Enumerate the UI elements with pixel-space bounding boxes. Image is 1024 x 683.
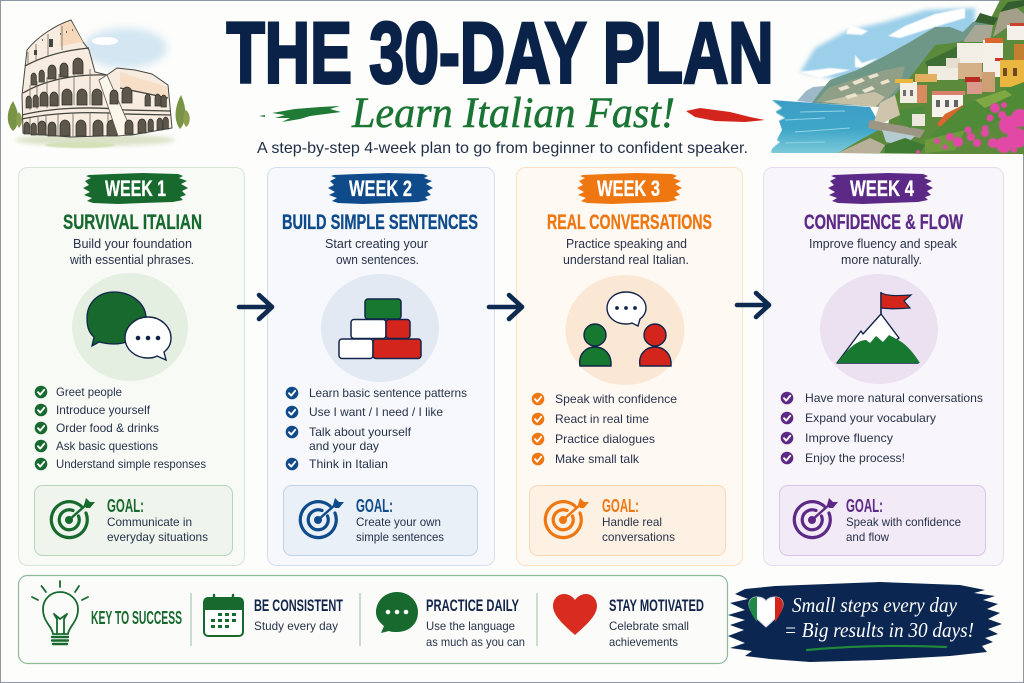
week 1 checklist: Greet people — [56, 385, 122, 399]
week 4 goal box: GOAL: — [846, 496, 883, 516]
week 3 goal box — [530, 486, 726, 556]
week 4 banner — [828, 173, 933, 204]
practice daily: Use the language — [426, 619, 515, 633]
be consistent — [254, 596, 343, 633]
stay motivated — [609, 596, 704, 649]
stay motivated: Celebrate small — [609, 619, 689, 633]
week 1 description — [69, 236, 194, 267]
stay motivated: STAY MOTIVATED — [609, 596, 704, 615]
week 1 checklist: Understand simple responses — [56, 457, 206, 471]
brush stroke: green — [259, 106, 341, 122]
week 2 description: Start creating your — [325, 236, 429, 251]
brush stroke: red — [686, 108, 765, 122]
week 2 banner — [328, 173, 433, 204]
illustration: Amalfi coast — [765, 0, 1024, 164]
week 3 checklist: Speak with confidence — [555, 392, 677, 406]
subtitle script: Learn Italian Fast! — [351, 90, 675, 137]
week 3 checklist: Make small talk — [555, 452, 640, 466]
week 2 checklist: Use I want / I need / I like — [309, 405, 443, 419]
week 1 goal box: GOAL: — [107, 496, 144, 516]
week 2 heading: BUILD SIMPLE SENTENCES — [282, 211, 478, 234]
callout text: Small steps every day — [792, 593, 958, 617]
icon: speech bubbles — [72, 273, 188, 381]
week 4 banner: WEEK 4 — [850, 176, 915, 201]
practice daily: PRACTICE DAILY — [426, 596, 519, 615]
week 2 checklist: and your day — [309, 439, 379, 453]
week 1 goal box: Communicate in — [107, 515, 192, 529]
panel: week 4 — [764, 168, 1004, 566]
practice daily: as much as you can — [426, 635, 525, 649]
icon: light bulb — [32, 581, 88, 644]
week 4 checklist — [781, 391, 983, 465]
practice daily — [426, 596, 525, 649]
week 1 heading: SURVIVAL ITALIAN — [63, 211, 202, 234]
week 3 banner: WEEK 3 — [597, 176, 660, 201]
week 3 checklist — [532, 392, 677, 466]
week 4 goal box: and flow — [846, 530, 889, 544]
week 4 goal box — [780, 486, 986, 556]
arrow 1 — [239, 295, 272, 319]
tagline: A step-by-step 4-week plan to go from beginner to confident speaker. — [257, 140, 748, 157]
week 2 banner: WEEK 2 — [349, 176, 412, 201]
week 3 banner — [577, 173, 682, 204]
week 3 description — [563, 236, 689, 267]
week 4 checklist: Have more natural conversations — [805, 391, 983, 405]
week 3 heading: REAL CONVERSATIONS — [547, 211, 712, 234]
illustration: Colosseum — [8, 20, 190, 148]
week 1 description: with essential phrases. — [69, 252, 194, 267]
week 3 description: Practice speaking and — [566, 236, 687, 251]
panel: week 2 — [268, 168, 494, 566]
key to success label: KEY TO SUCCESS — [91, 608, 182, 628]
be consistent: BE CONSISTENT — [254, 596, 343, 615]
week 3 goal box: GOAL: — [602, 496, 639, 516]
callout text: = Big results in 30 days! — [784, 618, 974, 642]
title: THE 30-DAY PLAN — [226, 6, 774, 102]
icon: two people talking — [566, 275, 684, 385]
week 2 description — [325, 236, 429, 267]
icon: calendar — [204, 595, 243, 636]
callout text — [784, 593, 974, 642]
week 1 banner: WEEK 1 — [105, 176, 166, 201]
week 2 description: own sentences. — [336, 252, 419, 267]
week 1 checklist: Introduce yourself — [56, 403, 151, 417]
icon: mountain with flag — [820, 274, 938, 384]
week 2 checklist: Think in Italian — [309, 457, 388, 471]
week 2 checklist: Learn basic sentence patterns — [309, 386, 467, 400]
week 3 checklist: React in real time — [555, 412, 649, 426]
panel: week 1 — [18, 168, 244, 566]
panel: week 3 — [516, 168, 742, 566]
week 1 checklist — [35, 385, 206, 471]
week 2 goal box: simple sentences — [356, 530, 444, 544]
week 4 checklist: Improve fluency — [805, 431, 893, 445]
icon: heart — [553, 594, 597, 635]
week 4 description: more naturally. — [841, 252, 922, 267]
icon: chat bubble — [376, 592, 418, 633]
arrow 2 — [489, 295, 522, 319]
week 4 description: Improve fluency and speak — [809, 236, 957, 251]
week 1 banner — [83, 173, 188, 204]
week 1 goal box: everyday situations — [107, 530, 208, 544]
be consistent: Study every day — [254, 619, 338, 633]
week 3 checklist: Practice dialogues — [555, 432, 655, 446]
callout: small steps — [728, 582, 1002, 662]
week 2 checklist — [286, 386, 467, 471]
week 4 checklist: Expand your vocabulary — [805, 411, 936, 425]
week 4 goal box: Speak with confidence — [846, 515, 961, 529]
week 1 checklist: Order food & drinks — [56, 421, 159, 435]
arrow 3 — [737, 293, 769, 317]
week 1 description: Build your foundation — [73, 236, 192, 251]
week 3 goal box: Handle real — [602, 515, 662, 529]
week 3 goal box: conversations — [602, 530, 675, 544]
week 1 checklist: Ask basic questions — [56, 439, 158, 453]
week 1 goal box — [34, 486, 232, 556]
icon: building blocks — [321, 274, 439, 382]
week 2 goal box — [284, 486, 478, 556]
week 4 checklist: Enjoy the process! — [805, 451, 905, 465]
week 3 description: understand real Italian. — [563, 252, 689, 267]
week 4 description — [809, 236, 957, 267]
week 2 goal box: GOAL: — [356, 496, 393, 516]
icon: Italian flag heart — [749, 597, 783, 627]
week 2 goal box: Create your own — [356, 515, 441, 529]
stay motivated: achievements — [609, 635, 678, 649]
week 2 checklist: Talk about yourself — [309, 425, 412, 439]
panel: key to success — [18, 576, 728, 664]
